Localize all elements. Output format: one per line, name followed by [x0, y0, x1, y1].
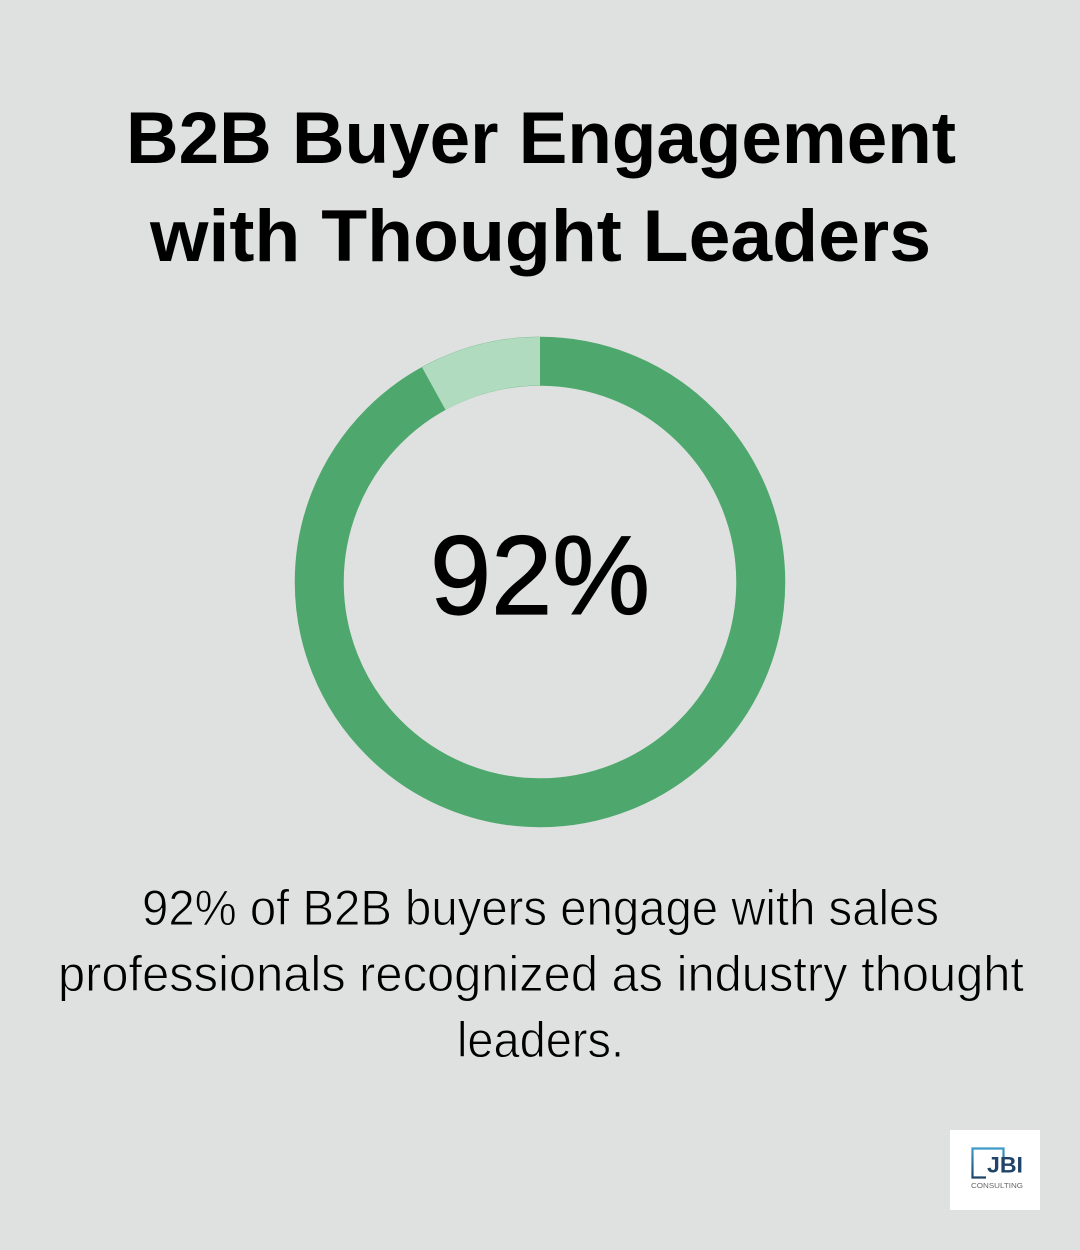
description text: leaders.	[457, 1012, 624, 1068]
logo: JBI Consulting	[950, 1130, 1040, 1210]
center value: 92%	[430, 513, 650, 638]
main segment (92%)	[319, 361, 761, 803]
description text	[58, 880, 1024, 1068]
title	[126, 98, 956, 277]
remainder segment (8%)	[422, 337, 540, 410]
donut chart: 92%	[319, 337, 761, 803]
logo letters: JBI	[987, 1152, 1023, 1178]
logo background	[950, 1130, 1040, 1210]
title: B2B Buyer Engagement	[126, 98, 956, 179]
logo square mark	[972, 1148, 1004, 1178]
logo caption: CONSULTING	[971, 1183, 1023, 1190]
title: with Thought Leaders	[149, 196, 931, 277]
description text: 92% of B2B buyers engage with sales	[142, 880, 939, 936]
description text: professionals recognized as industry thought	[58, 946, 1024, 1002]
